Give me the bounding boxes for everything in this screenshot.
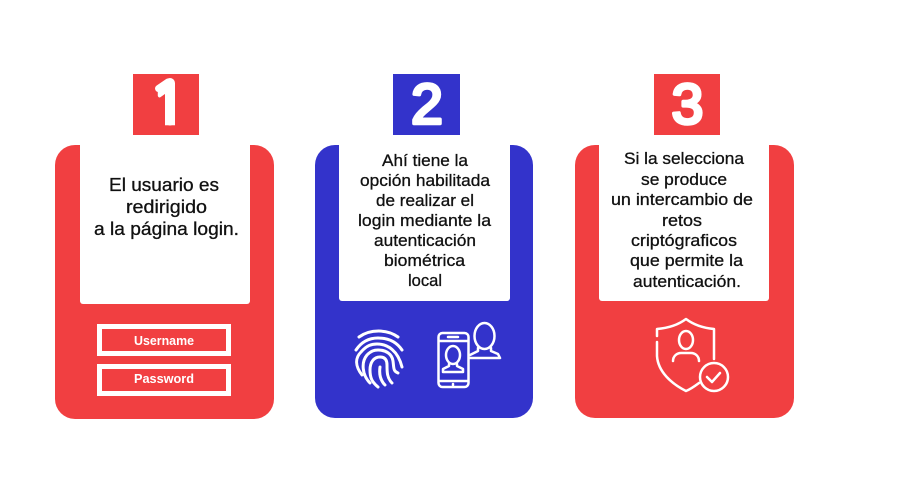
icon: fingerprint — [356, 331, 402, 387]
icon: phone with face recognition — [438, 323, 500, 387]
text panel 1 — [80, 140, 250, 304]
text panel 3: que permite la — [630, 251, 744, 270]
number badge 3 — [654, 72, 720, 136]
text panel 2: Ahí tiene la — [382, 151, 469, 170]
panel: step 3 — [575, 72, 794, 418]
panel: step 2 — [315, 72, 533, 418]
number badge 2: 2 — [411, 72, 443, 136]
text panel 3 — [599, 140, 769, 301]
username field: Username — [134, 334, 194, 348]
card background 1 — [55, 145, 274, 419]
text panel 3: Si la selecciona — [624, 149, 745, 168]
number badge 1: 1 — [154, 72, 186, 136]
text panel 3: un intercambio de — [611, 190, 753, 209]
text panel 2 — [339, 140, 510, 301]
password field — [100, 366, 228, 394]
text panel 2: opción habilitada — [360, 171, 491, 190]
number badge 3: 3 — [672, 72, 703, 136]
text panel 3: criptógraficos — [631, 231, 737, 250]
password field: Password — [134, 372, 194, 386]
text panel 2: biométrica — [384, 251, 466, 270]
username field — [100, 326, 228, 354]
text panel 2: de realizar el — [376, 191, 474, 210]
icon: shield with user and check — [657, 319, 728, 391]
text panel 1: a la página login. — [94, 219, 239, 239]
panel: step 1 — [55, 72, 274, 419]
card background 3 — [575, 145, 794, 418]
text panel 3: retos — [662, 211, 702, 230]
text panel 1: El usuario es — [109, 175, 219, 195]
text panel 3: se produce — [641, 170, 727, 189]
text panel 1: redirigido — [126, 197, 207, 217]
text panel 2: login mediante la — [358, 211, 492, 230]
text panel 2: local — [408, 271, 442, 290]
text panel 3: autenticación. — [633, 272, 741, 291]
number badge 2 — [393, 72, 460, 136]
number badge 1 — [133, 72, 199, 136]
text panel 2: autenticación — [374, 231, 476, 250]
card background 2 — [315, 145, 533, 418]
